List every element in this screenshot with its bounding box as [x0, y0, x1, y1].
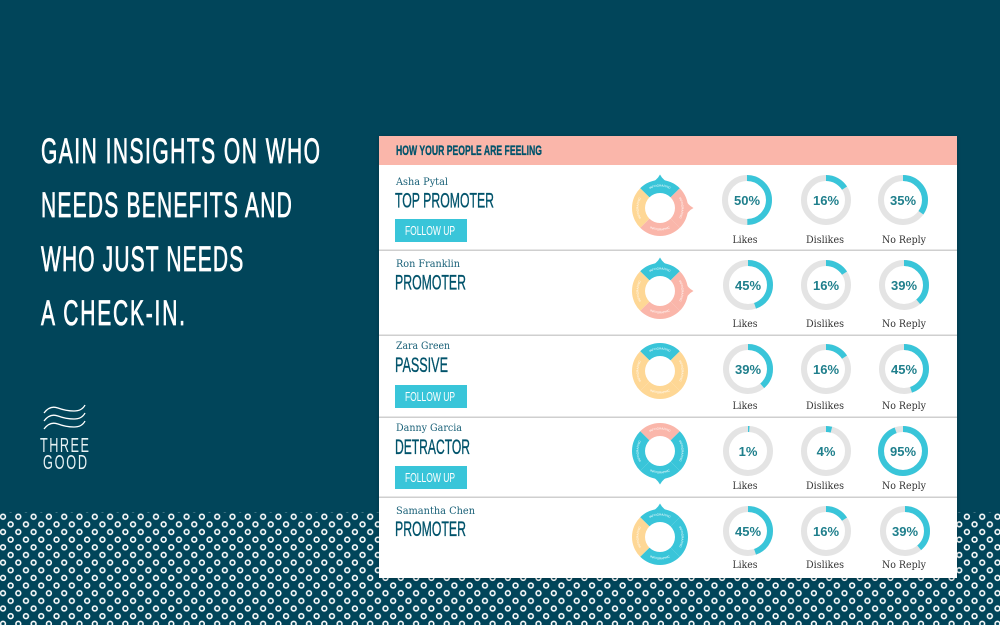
- headline: [41, 133, 320, 333]
- gauge: no reply: [881, 429, 926, 492]
- gauge: no reply: [882, 263, 926, 330]
- row: Zara Green: [395, 340, 929, 412]
- donut icon: [632, 423, 688, 484]
- person label: Samantha Chen: [396, 505, 475, 517]
- gauge: no reply: 45%: [891, 362, 917, 377]
- gauge: dislikes: Dislikes: [806, 401, 844, 412]
- gauge: likes: Likes: [732, 319, 758, 330]
- gauge: dislikes: Dislikes: [806, 319, 844, 330]
- person label: TOP PROMOTER: [395, 190, 494, 212]
- donut icon: INFOGRAPHIC: [679, 440, 684, 462]
- gauge: dislikes: [804, 178, 848, 246]
- gauge: no reply: No Reply: [882, 319, 926, 330]
- donut icon: INFOGRAPHIC: [650, 226, 670, 230]
- row: Asha Pytal: [395, 174, 928, 246]
- person label: [395, 176, 494, 212]
- donut icon: INFOGRAPHIC: [679, 526, 684, 548]
- person label: PASSIVE: [395, 354, 448, 377]
- donut icon: INFOGRAPHIC: [636, 526, 641, 548]
- gauge: dislikes: [804, 429, 848, 492]
- donut icon: INFOGRAPHIC: [636, 197, 641, 219]
- gauge: no reply: No Reply: [882, 401, 926, 412]
- donut icon: INFOGRAPHIC: [650, 310, 670, 314]
- logo: Three Good: [40, 405, 89, 474]
- gauge: no reply: No Reply: [882, 560, 926, 571]
- gauge: likes: Likes: [732, 235, 758, 246]
- gauge: dislikes: [804, 263, 848, 330]
- gauge: dislikes: Dislikes: [806, 235, 844, 246]
- gauge: no reply: 39%: [891, 278, 917, 293]
- headline: NEEDS BENEFITS AND: [41, 187, 292, 225]
- donut icon: INFOGRAPHIC: [636, 280, 641, 302]
- gauge: likes: 50%: [734, 193, 760, 208]
- donut icon: INFOGRAPHIC: [650, 469, 670, 474]
- gauge: likes: [726, 263, 770, 330]
- gauge: likes: 45%: [735, 278, 761, 293]
- gauge: likes: [726, 429, 770, 492]
- follow up button: FOLLOW UP: [405, 471, 455, 485]
- gauge: dislikes: Dislikes: [806, 560, 844, 571]
- gauge: likes: Likes: [732, 560, 758, 571]
- panel header: HOW YOUR PEOPLE ARE FEELING: [396, 142, 542, 158]
- person label: [395, 505, 475, 541]
- person label: DETRACTOR: [395, 436, 470, 459]
- gauge: no reply: 39%: [892, 524, 918, 539]
- logo: Three Good: THREE: [40, 434, 89, 457]
- gauge: likes: Likes: [732, 401, 758, 412]
- person label: PROMOTER: [395, 518, 466, 541]
- donut icon: [632, 258, 694, 319]
- donut icon: [632, 174, 694, 236]
- gauge: no reply: No Reply: [882, 481, 926, 492]
- gauge: dislikes: 16%: [813, 193, 839, 208]
- donut icon: INFOGRAPHIC: [679, 360, 684, 382]
- gauge: no reply: [882, 509, 927, 571]
- panel: people feelings card: [376, 136, 960, 581]
- follow up button: [395, 466, 467, 489]
- headline: GAIN INSIGHTS ON WHO: [41, 133, 320, 171]
- donut icon: INFOGRAPHIC: [650, 555, 670, 560]
- gauge: dislikes: 4%: [817, 444, 836, 459]
- donut icon: INFOGRAPHIC: [679, 197, 684, 219]
- gauge: no reply: [882, 347, 926, 412]
- gauge: dislikes: Dislikes: [806, 481, 844, 492]
- gauge: likes: 1%: [739, 444, 758, 459]
- logo: Three Good: GOOD: [43, 451, 87, 474]
- dotted pattern band: [0, 512, 1000, 625]
- person label: Danny Garcia: [396, 422, 462, 434]
- row: Samantha Chen: [395, 504, 930, 571]
- gauge: no reply: No Reply: [882, 235, 926, 246]
- gauge: dislikes: 16%: [813, 524, 839, 539]
- follow up button: FOLLOW UP: [405, 224, 455, 238]
- donut icon: [632, 504, 688, 565]
- follow up button: FOLLOW UP: [405, 390, 455, 404]
- headline: A CHECK-IN.: [41, 295, 185, 333]
- panel header: [379, 136, 957, 165]
- gauge: likes: [726, 509, 770, 571]
- gauge: likes: Likes: [732, 481, 758, 492]
- donut icon: INFOGRAPHIC: [649, 184, 671, 189]
- donut icon: [632, 343, 688, 399]
- gauge: likes: 39%: [735, 362, 761, 377]
- row: Danny Garcia: [395, 422, 928, 492]
- donut icon: INFOGRAPHIC: [649, 348, 671, 352]
- headline: WHO JUST NEEDS: [41, 241, 243, 279]
- gauge: likes: 45%: [735, 524, 761, 539]
- follow up button: [395, 385, 467, 408]
- gauge: no reply: [881, 178, 926, 246]
- gauge: dislikes: 16%: [813, 278, 839, 293]
- gauge: likes: [726, 347, 770, 412]
- person label: [395, 340, 450, 377]
- row: Ron Franklin: [395, 258, 929, 330]
- donut icon: INFOGRAPHIC: [636, 360, 641, 382]
- gauge: dislikes: [804, 347, 848, 412]
- gauge: no reply: 35%: [890, 193, 916, 208]
- gauge: likes: [725, 178, 769, 246]
- donut icon: INFOGRAPHIC: [636, 440, 641, 462]
- person label: Ron Franklin: [396, 258, 460, 270]
- person label: Zara Green: [396, 340, 450, 352]
- donut icon: INFOGRAPHIC: [679, 280, 684, 302]
- donut icon: INFOGRAPHIC: [649, 268, 671, 272]
- gauge: no reply: 95%: [890, 444, 916, 459]
- person label: [395, 422, 470, 459]
- donut icon: INFOGRAPHIC: [649, 514, 671, 518]
- gauge: dislikes: [804, 509, 848, 571]
- donut icon: INFOGRAPHIC: [649, 428, 671, 432]
- donut icon: INFOGRAPHIC: [650, 389, 670, 394]
- gauge: dislikes: 16%: [813, 362, 839, 377]
- person label: Asha Pytal: [395, 176, 449, 188]
- person label: PROMOTER: [395, 272, 466, 294]
- person label: [395, 258, 466, 294]
- follow up button: [395, 219, 467, 242]
